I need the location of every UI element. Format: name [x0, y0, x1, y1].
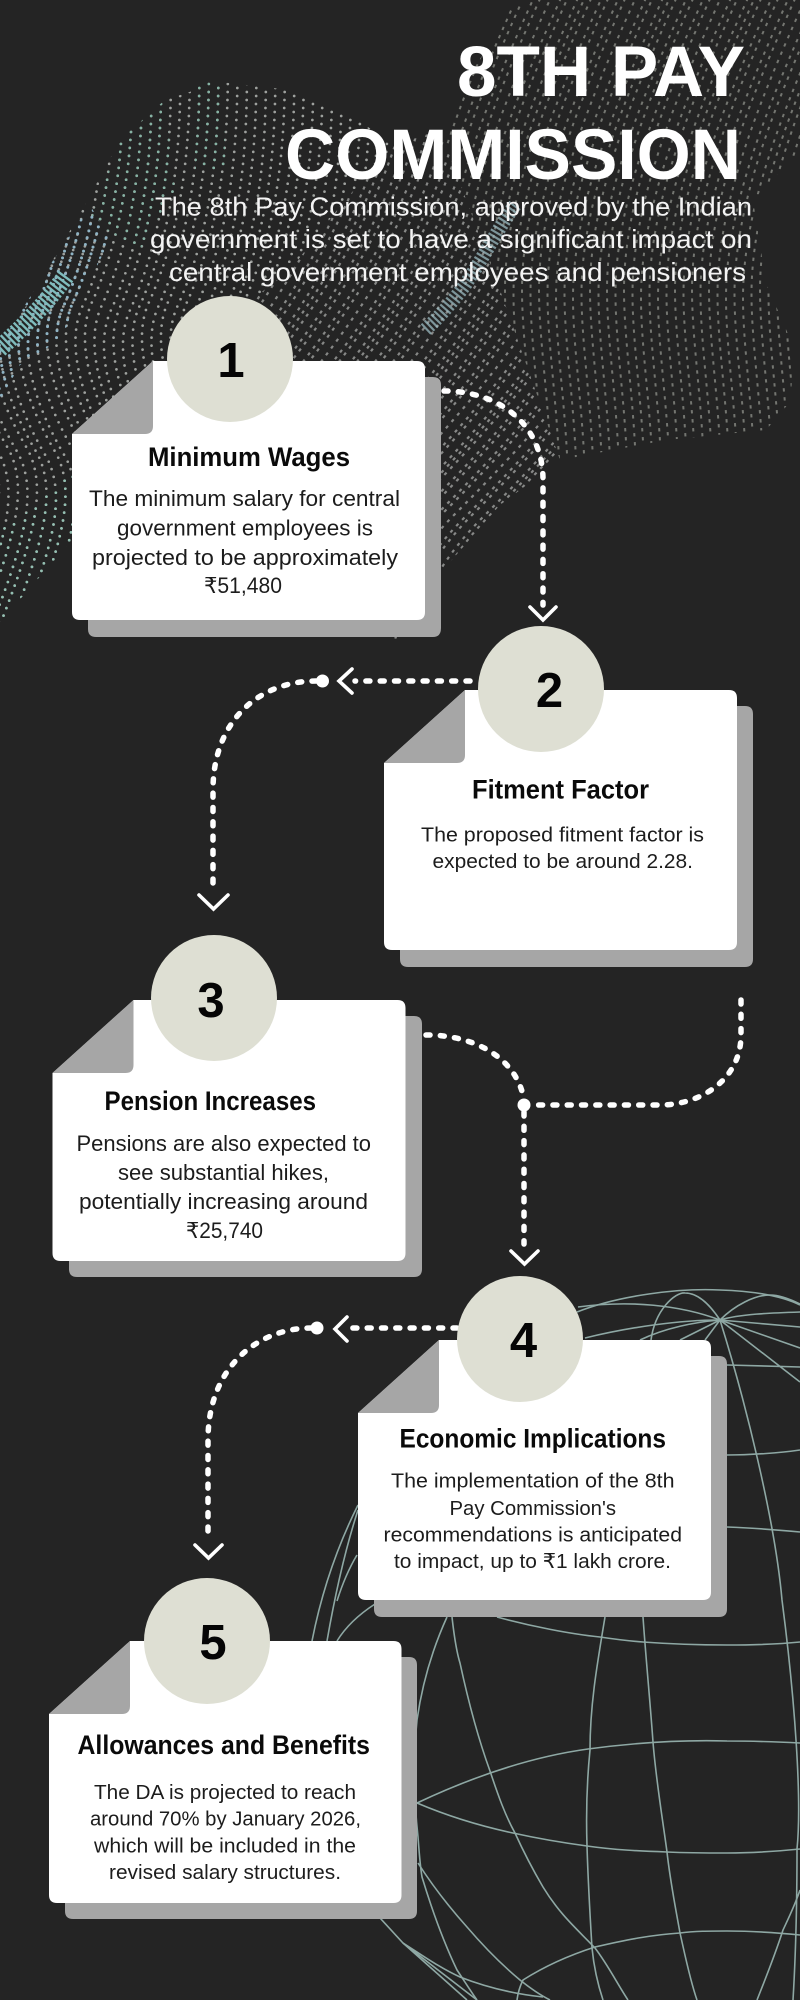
- panel: step 3 pension increases: 3: [197, 974, 225, 1028]
- panel: step 1 minimum wages: 1: [217, 334, 245, 388]
- title: COMMISSION: [285, 116, 741, 195]
- panel: step 2 fitment factor: The proposed fitment factor is: [421, 824, 704, 846]
- panel: step 2 fitment factor: Fitment Factor: [472, 774, 649, 804]
- panel: step 1 minimum wages: [72, 296, 441, 637]
- panel: step 5 allowances and benefits: around 70% by January 2026,: [90, 1808, 361, 1830]
- panel: step 4 economic implications: [358, 1276, 727, 1617]
- panel: step 2 fitment factor: expected to be around 2.28.: [432, 850, 693, 873]
- panel: step 4 economic implications: Pay Commission's: [450, 1497, 616, 1520]
- panel: step 3 pension increases: Pensions are also expected to: [76, 1131, 371, 1156]
- panel: step 5 allowances and benefits: revised salary structures.: [109, 1861, 341, 1884]
- panel: step 5 allowances and benefits: The DA is projected to reach: [94, 1781, 356, 1804]
- panel: step 1 minimum wages: projected to be approximately: [92, 545, 398, 570]
- title: [285, 33, 745, 195]
- subtitle: The 8th Pay Commission, approved by the Indian: [155, 192, 752, 222]
- panel: step 3 pension increases: see substantial hikes,: [118, 1160, 329, 1185]
- panel: step 4 economic implications: 4: [510, 1314, 537, 1368]
- panel: step 4 economic implications: recommendations is anticipated: [384, 1524, 682, 1546]
- subtitle: central government employees and pensioners: [169, 257, 746, 287]
- panel: step 5 allowances and benefits: which will be included in the: [93, 1834, 356, 1858]
- title: 8TH PAY: [457, 33, 745, 112]
- panel: step 1 minimum wages: Minimum Wages: [148, 442, 350, 472]
- connector: step 1 to step 2: [444, 391, 556, 620]
- panel: step 4 economic implications: Economic Implications: [400, 1424, 666, 1454]
- panel: step 1 minimum wages: government employees is: [117, 516, 373, 540]
- globe line art: [312, 1290, 800, 2000]
- panel: step 1 minimum wages: The minimum salary for central: [89, 486, 400, 511]
- connector: step 4 to step 5: [195, 1317, 457, 1558]
- panel: step 3 pension increases: potentially increasing around: [79, 1189, 368, 1214]
- panel: step 5 allowances and benefits: Allowances and Benefits: [78, 1730, 370, 1760]
- panel: step 4 economic implications: to impact, up to ₹1 lakh crore.: [394, 1550, 671, 1573]
- dotted wave background: [0, 0, 800, 648]
- panel: step 2 fitment factor: [384, 626, 753, 967]
- panel: step 1 minimum wages: ₹51,480: [204, 573, 282, 598]
- panel: step 3 pension increases: [52, 935, 422, 1277]
- connector: step 2 to step 3: [199, 669, 470, 909]
- subtitle: government is set to have a significant impact on: [150, 224, 752, 254]
- panel: step 3 pension increases: ₹25,740: [186, 1218, 263, 1243]
- connector: step 3 to step 4: [426, 1000, 741, 1264]
- panel: step 3 pension increases: Pension Increases: [104, 1086, 316, 1116]
- panel: step 2 fitment factor: 2: [536, 664, 563, 718]
- panel: step 5 allowances and benefits: [49, 1578, 417, 1919]
- panel: step 5 allowances and benefits: 5: [199, 1616, 227, 1670]
- subtitle: [150, 192, 752, 287]
- panel: step 4 economic implications: The implementation of the 8th: [391, 1470, 674, 1492]
